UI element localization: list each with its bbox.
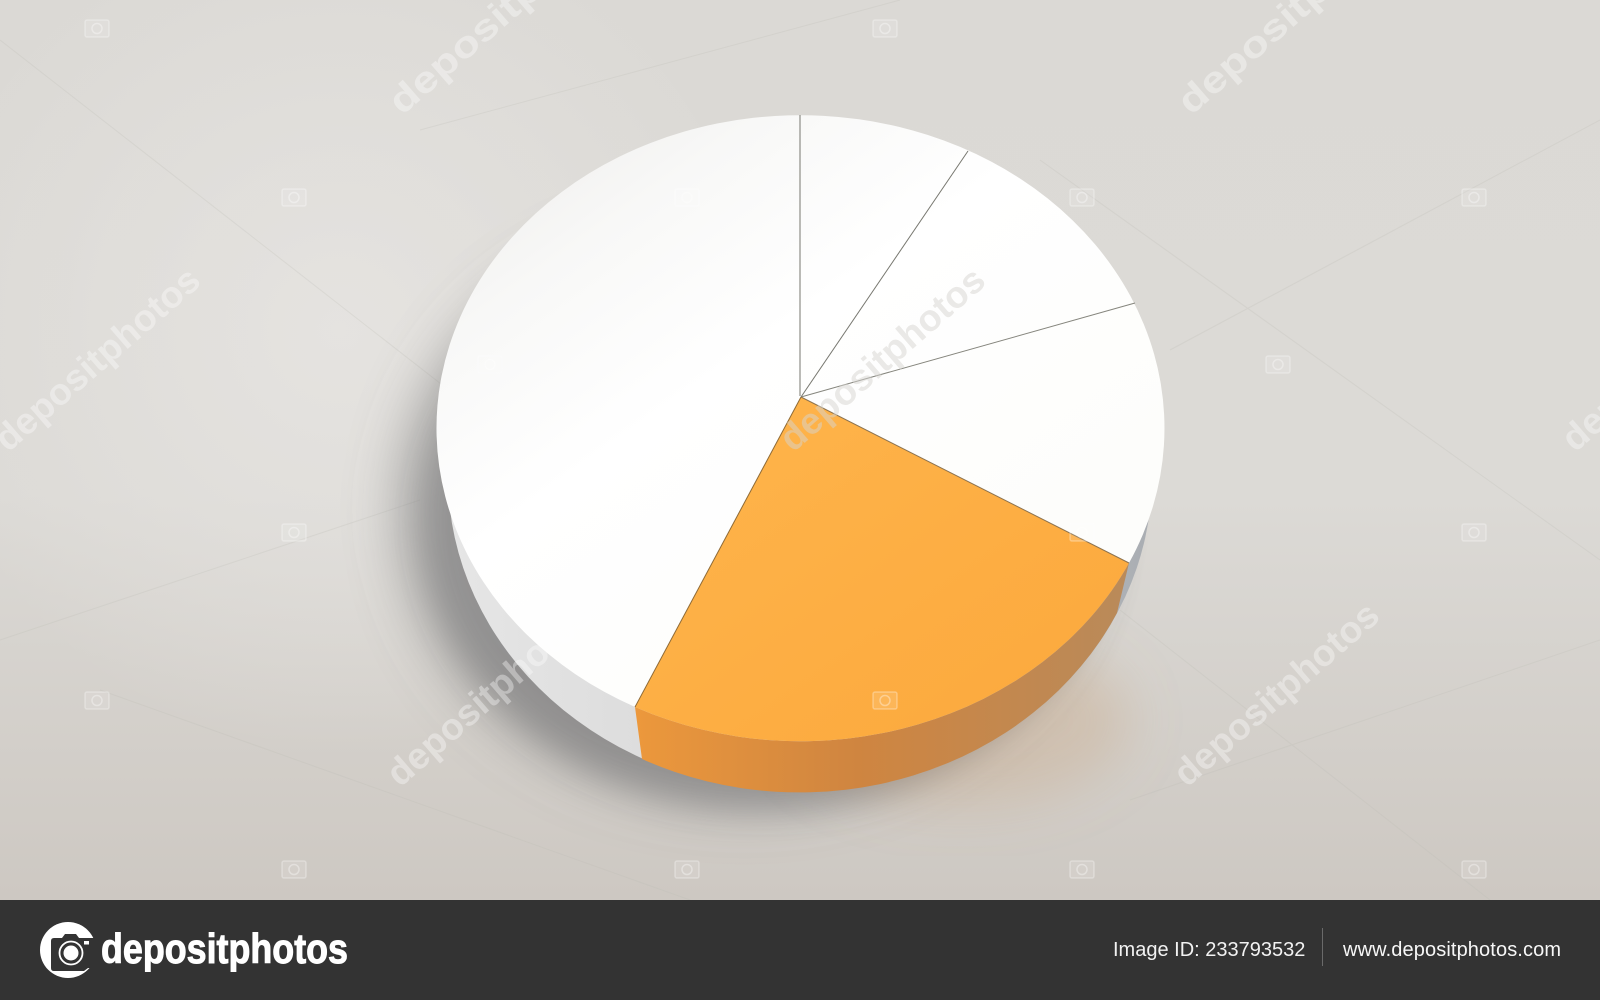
pie side: white wall [448, 160, 1152, 792]
footer logo wordmark: depositphotos [101, 925, 348, 972]
footer bar [0, 900, 1600, 1000]
pie cast shadow [400, 215, 1130, 810]
footer divider [1322, 928, 1323, 966]
pie side: orange wall [635, 563, 1129, 792]
white top surface [436, 115, 1164, 707]
watermark logos [0, 0, 1600, 794]
website url: www.depositphotos.com [1342, 939, 1561, 961]
3D pie chart [436, 115, 1164, 792]
orange slice top [635, 397, 1129, 741]
footer logo icon: camera in circle [40, 922, 96, 978]
image id: Image ID: 233793532 [1113, 939, 1305, 961]
watermark logos: depositphotos [378, 594, 600, 794]
watermark logos: depositphotos [771, 259, 993, 459]
slice divider lines [635, 115, 1135, 707]
watermark logos: depositphotos [1165, 594, 1387, 794]
watermark camera icons [85, 20, 1486, 878]
